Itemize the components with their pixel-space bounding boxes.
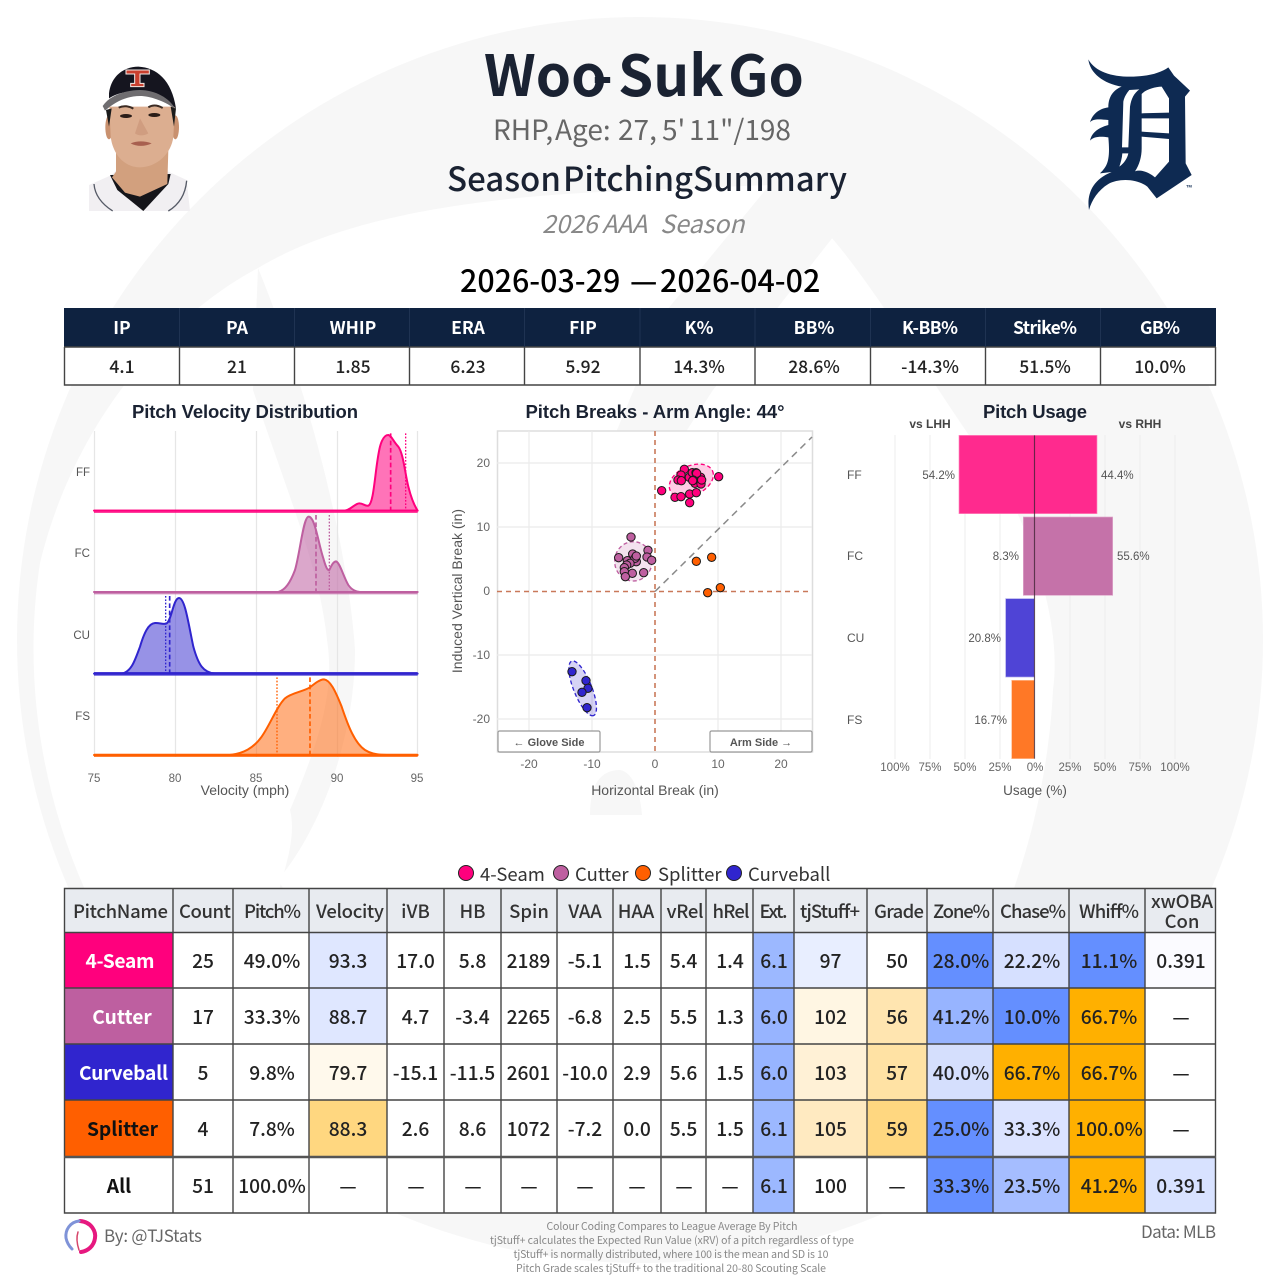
row: curveball: 79.7	[329, 1058, 367, 1086]
ridge labels: FC	[75, 548, 90, 560]
row: 4-seam: 97	[820, 946, 841, 974]
break x ticks: 10	[711, 757, 725, 771]
row: all pitches	[106, 1171, 1206, 1199]
stats values row: 51.5%	[1019, 354, 1071, 379]
row: all pitches: 100.0%	[238, 1171, 306, 1199]
usage right values	[1101, 470, 1150, 563]
row: 4-seam: 93.3	[329, 946, 367, 974]
row: 4-seam: 25	[192, 946, 214, 974]
row: all pitches: —	[888, 1171, 906, 1199]
table header row: Ext.	[760, 898, 788, 924]
row: 4-seam: 22.2%	[1004, 946, 1060, 974]
pitch legend: Cutter	[575, 861, 629, 887]
usage axis ticks: 0%	[1027, 762, 1043, 774]
usage axis ticks: 50%	[1093, 762, 1117, 774]
stats header row: IP	[113, 315, 131, 340]
row: curveball: 6.0	[760, 1058, 788, 1086]
stats header row: BB%	[794, 315, 834, 340]
player bio line: 5'	[662, 109, 685, 149]
table header row: Zone%	[933, 898, 990, 924]
row: all pitches: 0.391	[1156, 1171, 1206, 1199]
pitch legend: Splitter	[658, 861, 722, 887]
table header row: hRel	[712, 898, 750, 924]
subtitle: Pitching	[563, 153, 693, 201]
usage left values: 16.7%	[974, 715, 1007, 727]
row: splitter: 1.5	[716, 1114, 744, 1142]
row: 4-seam: 1.5	[623, 946, 651, 974]
row: 4-seam: -5.1	[568, 946, 602, 974]
pitch metrics table	[64, 888, 1216, 1213]
table cell fills	[64, 888, 1215, 1213]
row: 4-seam: 17.0	[396, 946, 435, 974]
row: curveball: 5	[198, 1058, 208, 1086]
usage pitch labels: FS	[847, 713, 862, 727]
row: cutter: 41.2%	[933, 1002, 989, 1030]
usage axis ticks: 50%	[953, 762, 977, 774]
cutter cluster	[614, 533, 656, 581]
footnotes	[490, 1219, 854, 1276]
table header row: Pitch%	[244, 898, 301, 924]
velocity axis ticks: 95	[411, 773, 423, 785]
chart: pitch break scatter	[449, 431, 812, 798]
row: cutter: 66.7%	[1081, 1002, 1137, 1030]
stats header row: PA	[226, 315, 249, 340]
pitch legend	[458, 861, 830, 887]
row: splitter: 33.3%	[1004, 1114, 1060, 1142]
row: curveball: 1.5	[716, 1058, 744, 1086]
usage pitch labels: FC	[847, 549, 863, 563]
table header row: iVB	[401, 898, 430, 924]
break x ticks: 0	[652, 757, 659, 771]
usage axis ticks: 75%	[918, 762, 942, 774]
row: cutter: 102	[814, 1002, 847, 1030]
arm side label	[710, 731, 812, 752]
row: curveball: 5.6	[670, 1058, 697, 1086]
glove side label	[498, 731, 600, 752]
row: cutter: 33.3%	[244, 1002, 300, 1030]
usage axis ticks: 25%	[988, 762, 1012, 774]
stats header row: ERA	[451, 315, 486, 340]
velocity axis ticks: 90	[331, 773, 343, 785]
stats values row: 14.3%	[673, 354, 725, 379]
player headshot	[89, 67, 190, 211]
stats header row: GB%	[1140, 315, 1180, 340]
row: cutter: -3.4	[455, 1002, 490, 1030]
icon: team logo: TM	[1186, 183, 1193, 188]
row: curveball: —	[1172, 1058, 1190, 1086]
stats table	[64, 308, 1216, 385]
row: cutter: —	[1172, 1002, 1190, 1030]
row: all pitches: —	[520, 1171, 538, 1199]
title: player name: Go	[728, 31, 804, 113]
row: 4-seam: 0.391	[1156, 946, 1206, 974]
row: curveball: -11.5	[450, 1058, 495, 1086]
table header row: xwOBA	[1151, 888, 1213, 914]
table header row: Grade	[874, 898, 924, 924]
velocity axis ticks: 80	[169, 773, 181, 785]
date range: —	[630, 257, 657, 301]
table header row: vRel	[666, 898, 704, 924]
ridge labels	[73, 467, 90, 723]
break y ticks: 20	[477, 456, 490, 470]
row: 4-seam: 11.1%	[1081, 946, 1137, 974]
subtitle: Season	[447, 153, 561, 201]
break y ticks: -20	[473, 712, 490, 726]
usage left values: 54.2%	[922, 470, 955, 482]
stats header row: K-BB%	[902, 315, 958, 340]
row: splitter: 59	[886, 1114, 908, 1142]
row: 4-seam: 6.1	[760, 946, 788, 974]
row: all pitches: 33.3%	[933, 1171, 989, 1199]
row: all pitches: —	[464, 1171, 482, 1199]
footnotes: tjStuff+ is normally distributed, where 100 is the mean and SD is 10	[514, 1247, 829, 1262]
ridge labels: CU	[73, 630, 90, 642]
pitch legend: 4-Seam	[480, 861, 545, 887]
row: splitter: 5.5	[670, 1114, 697, 1142]
row: splitter: 0.0	[623, 1114, 651, 1142]
break x ticks: 20	[774, 757, 788, 771]
ridge labels: FF	[76, 467, 90, 479]
stats values row: -14.3%	[901, 354, 959, 379]
table header row: Chase%	[1000, 898, 1066, 924]
row: all pitches: 41.2%	[1081, 1171, 1137, 1199]
row: all pitches: 6.1	[760, 1171, 788, 1199]
row: 4-seam	[86, 946, 1206, 974]
usage axis ticks: 100%	[880, 762, 910, 774]
icon: TJStats logo	[66, 1221, 95, 1252]
usage right values: 44.4%	[1101, 470, 1134, 482]
title: player name: -	[592, 31, 613, 113]
row: all pitches: 100	[814, 1171, 847, 1199]
ridge labels: FS	[75, 711, 90, 723]
stats values row: 5.92	[565, 354, 601, 379]
stats values row: 4.1	[109, 354, 135, 379]
usage left values: 8.3%	[993, 551, 1019, 563]
stats values row: 28.6%	[788, 354, 840, 379]
row: curveball: 2.9	[623, 1058, 651, 1086]
row: curveball: 103	[814, 1058, 847, 1086]
velocity axis ticks: 85	[250, 773, 262, 785]
row: splitter: 1072	[507, 1114, 550, 1142]
usage bars	[959, 435, 1113, 759]
row: all pitches: 51	[192, 1171, 214, 1199]
row: all pitches: 23.5%	[1004, 1171, 1060, 1199]
row: curveball: -15.1	[393, 1058, 438, 1086]
table header row: HB	[459, 898, 486, 924]
chart: pitch usage butterfly	[847, 417, 1190, 798]
row: 4-seam: 5.4	[670, 946, 697, 974]
usage pitch labels: FF	[847, 468, 862, 482]
row: all pitches: —	[407, 1171, 425, 1199]
row: splitter: 7.8%	[249, 1114, 295, 1142]
break y ticks: 0	[483, 584, 490, 598]
ridge curves	[94, 433, 418, 757]
velocity axis ticks	[88, 773, 423, 785]
row: all pitches: —	[339, 1171, 357, 1199]
table header row: HAA	[618, 898, 655, 924]
break x ticks: -10	[583, 757, 601, 771]
row: splitter: Splitter	[87, 1114, 159, 1142]
stats header row: Strike%	[1013, 315, 1077, 340]
row: cutter: 5.5	[670, 1002, 697, 1030]
break y ticks: -10	[473, 648, 490, 662]
usage left values: 20.8%	[968, 633, 1001, 645]
row: all pitches: —	[721, 1171, 739, 1199]
row: cutter: 17	[192, 1002, 214, 1030]
season label: Season	[660, 205, 746, 241]
break y ticks	[473, 456, 490, 726]
stats header row: FIP	[569, 315, 597, 340]
row: 4-seam: 49.0%	[244, 946, 300, 974]
row: cutter	[92, 1002, 1190, 1030]
handedness labels	[909, 417, 1161, 431]
row: cutter: 56	[886, 1002, 908, 1030]
break x ticks: -20	[520, 757, 538, 771]
usage axis ticks: 100%	[1160, 762, 1190, 774]
table header row: Con	[1165, 908, 1199, 934]
row: curveball: Curveball	[79, 1058, 168, 1086]
season label: 2026	[542, 205, 601, 241]
player bio line: 27,	[618, 109, 657, 149]
stats values row: 21	[227, 354, 247, 379]
row: curveball: 2601	[507, 1058, 550, 1086]
break x ticks	[520, 757, 788, 771]
row: splitter	[87, 1114, 1190, 1142]
player bio line: Age:	[555, 109, 611, 149]
credit: By: @TJStats	[104, 1222, 202, 1247]
player bio line: RHP,	[493, 109, 553, 149]
row: splitter: 88.3	[329, 1114, 367, 1142]
row: cutter: 4.7	[402, 1002, 429, 1030]
icon: team logo	[1088, 59, 1193, 210]
table header row: PitchName	[73, 898, 168, 924]
row: splitter: 100.0%	[1075, 1114, 1143, 1142]
row: splitter: 2.6	[402, 1114, 429, 1142]
title: player name: Woo	[484, 31, 606, 113]
row: curveball: 40.0%	[933, 1058, 989, 1086]
row: curveball: 66.7%	[1004, 1058, 1060, 1086]
title: player name: Suk	[618, 31, 723, 113]
velocity axis title: Velocity (mph)	[201, 782, 289, 798]
date range: 2026-03-29	[460, 257, 620, 301]
usage axis ticks	[880, 762, 1190, 774]
row: 4-seam: 1.4	[716, 946, 744, 974]
season label: AAA	[602, 205, 648, 241]
stats header row	[113, 315, 1180, 340]
pitch legend: Curveball	[748, 861, 830, 887]
handedness labels: vs LHH	[909, 417, 951, 431]
row: splitter: 6.1	[760, 1114, 788, 1142]
chart: velocity ridgeline	[73, 431, 423, 798]
row: 4-seam: 28.0%	[933, 946, 989, 974]
row: curveball: 57	[886, 1058, 908, 1086]
row: 4-seam: 50	[886, 946, 908, 974]
break x axis title: Horizontal Break (in)	[591, 782, 719, 798]
date range: 2026-04-02	[660, 257, 820, 301]
footnotes: Colour Coding Compares to League Average By Pitch	[546, 1219, 798, 1234]
row: splitter: 105	[814, 1114, 847, 1142]
table header row: tjStuff+	[800, 898, 860, 924]
heading: velocity distribution: Pitch Velocity Distribution	[132, 401, 358, 422]
stats header row: WHIP	[330, 315, 376, 340]
row: splitter: 8.6	[459, 1114, 486, 1142]
table header row: VAA	[567, 898, 602, 924]
row: all pitches: —	[576, 1171, 594, 1199]
table header row: Count	[179, 898, 232, 924]
usage axis title: Usage (%)	[1003, 783, 1067, 798]
row: splitter: -7.2	[568, 1114, 602, 1142]
table header row: Whiff%	[1079, 898, 1139, 924]
usage axis ticks: 75%	[1128, 762, 1152, 774]
footnotes: tjStuff+ calculates the Expected Run Value (xRV) of a pitch regardless of type	[490, 1233, 854, 1248]
4-seam cluster	[657, 458, 723, 507]
row: splitter: 25.0%	[933, 1114, 989, 1142]
subtitle: Summary	[693, 153, 847, 201]
arm side label: Arm Side →	[730, 737, 792, 749]
row: 4-seam: 2189	[507, 946, 550, 974]
usage pitch labels: CU	[847, 631, 864, 645]
table header row: Spin	[509, 898, 549, 924]
row: cutter: 1.3	[716, 1002, 744, 1030]
glove side label: ← Glove Side	[514, 737, 584, 749]
row: cutter: 88.7	[329, 1002, 367, 1030]
row: 4-seam: 4-Seam	[86, 946, 154, 974]
row: curveball: 66.7%	[1081, 1058, 1137, 1086]
row: cutter: -6.8	[568, 1002, 602, 1030]
velocity axis ticks: 75	[88, 773, 100, 785]
footnotes: Pitch Grade scales tjStuff+ to the traditional 20-80 Scouting Scale	[516, 1261, 826, 1276]
break y axis title: Induced Vertical Break (in)	[449, 509, 465, 673]
row: curveball	[79, 1058, 1190, 1086]
usage pitch labels	[847, 468, 864, 727]
heading: pitch usage: Pitch Usage	[983, 401, 1087, 422]
table header row: Velocity	[315, 898, 384, 924]
usage right values: 55.6%	[1117, 551, 1150, 563]
row: cutter: 6.0	[760, 1002, 788, 1030]
stats values row: 10.0%	[1134, 354, 1186, 379]
row: cutter: 2.5	[623, 1002, 651, 1030]
splitter cluster	[692, 553, 724, 597]
row: cutter: 10.0%	[1004, 1002, 1060, 1030]
row: splitter: 4	[198, 1114, 209, 1142]
row: all pitches: —	[675, 1171, 693, 1199]
usage axis ticks: 25%	[1058, 762, 1082, 774]
row: cutter: 2265	[507, 1002, 550, 1030]
player bio line: 11"/198	[689, 109, 791, 149]
stats values row: 6.23	[450, 354, 486, 379]
stats header row: K%	[685, 315, 714, 340]
row: all pitches: —	[628, 1171, 646, 1199]
stats values row: 1.85	[335, 354, 371, 379]
row: splitter: —	[1172, 1114, 1190, 1142]
row: all pitches: All	[106, 1171, 131, 1199]
stats values row	[109, 354, 1186, 379]
row: curveball: 9.8%	[249, 1058, 295, 1086]
data source: Data: MLB	[1141, 1218, 1216, 1243]
heading: pitch breaks: Pitch Breaks - Arm Angle: 44°	[526, 401, 784, 422]
row: curveball: -10.0	[562, 1058, 608, 1086]
handedness labels: vs RHH	[1119, 417, 1161, 431]
row: 4-seam: 5.8	[459, 946, 486, 974]
curveball cluster	[563, 658, 602, 719]
row: cutter: Cutter	[92, 1002, 152, 1030]
usage left values	[922, 470, 1019, 727]
table header row	[73, 888, 1213, 934]
break y ticks: 10	[477, 520, 490, 534]
